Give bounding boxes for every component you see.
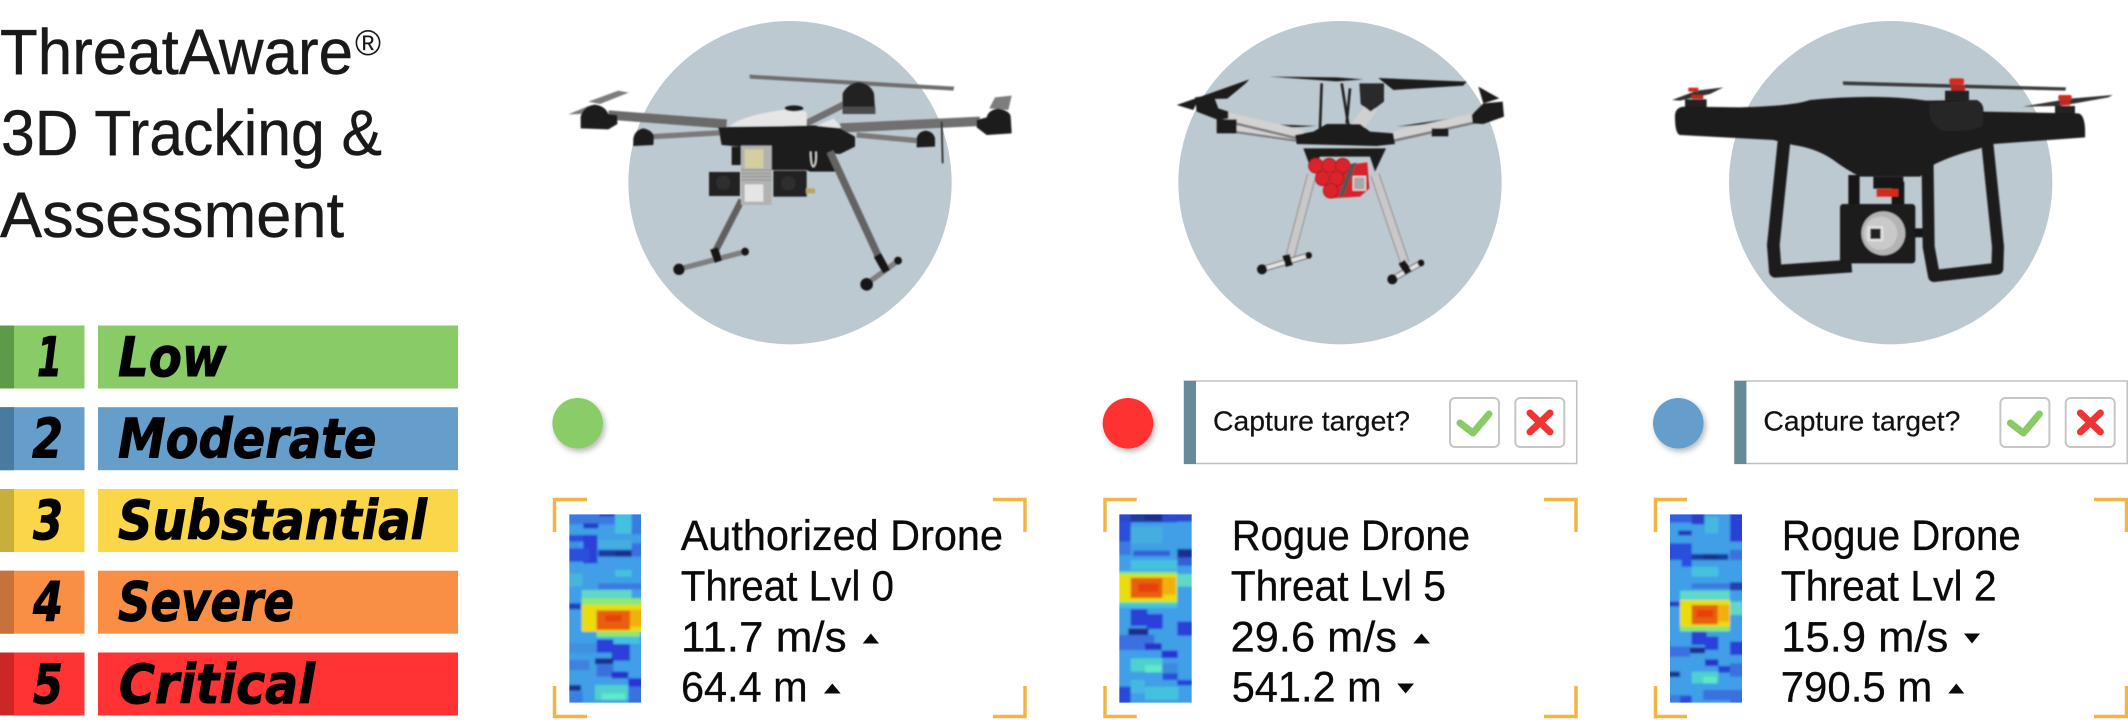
speed trend arrow: up [1413, 634, 1430, 644]
legend row 2: Moderate [0, 407, 458, 470]
readout text: 541.2 m [1232, 664, 1382, 712]
reject button [2066, 398, 2115, 447]
readout text [681, 512, 1003, 712]
title: 3D Tracking & [1, 97, 382, 169]
heatmap [1670, 514, 1742, 703]
legend row 4: Severe: 4 [32, 570, 63, 634]
readout text: Threat Lvl 5 [1231, 563, 1446, 611]
confirm button [2000, 398, 2049, 447]
legend row 3: Substantial: Substantial [118, 489, 428, 552]
readout text: Threat Lvl 2 [1781, 563, 1997, 611]
speed trend arrow: down [1964, 634, 1980, 644]
legend row 1: Low: 1 [37, 326, 62, 389]
legend row 5: Critical: 5 [33, 653, 63, 716]
readout text: 790.5 m [1781, 664, 1932, 712]
readout text: 29.6 m/s [1231, 614, 1397, 662]
title: Assessment [0, 179, 344, 251]
readout text: 64.4 m [681, 664, 808, 712]
capture prompt: Capture target? [1763, 406, 1960, 437]
title: ThreatAware [0, 16, 353, 88]
readout text: 11.7 m/s [681, 614, 847, 662]
legend row 2: Moderate: 2 [32, 408, 63, 470]
panel: rogue drone level 5 [1103, 381, 1577, 716]
drone 1 illustration [568, 21, 1012, 344]
panel: rogue drone level 2 [1653, 381, 2127, 716]
targeting brackets [554, 500, 1025, 716]
targeting brackets [1656, 500, 2126, 716]
threat level legend [0, 326, 458, 716]
distance trend arrow: up [1948, 684, 1964, 694]
readout text [1231, 512, 1470, 712]
drone 3 illustration [1672, 21, 2113, 344]
capture prompt [1184, 381, 1577, 464]
reject button [1515, 398, 1564, 447]
title [0, 16, 382, 251]
capture prompt: Capture target? [1213, 406, 1410, 437]
readout text: Authorized Drone [681, 512, 1003, 560]
status indicator: red [1103, 398, 1153, 449]
heatmap [1119, 514, 1192, 703]
status indicator: green [552, 398, 603, 449]
legend row 1: Low [0, 326, 458, 389]
legend row 3: Substantial: 3 [33, 489, 63, 552]
readout text [1781, 512, 2021, 712]
speed trend arrow: up [863, 634, 879, 644]
legend row 5: Critical: Critical [119, 653, 316, 716]
legend row 2: Moderate: Moderate [118, 408, 376, 470]
readout text: Rogue Drone [1232, 512, 1470, 560]
status indicator: blue [1653, 398, 1704, 449]
targeting brackets [1105, 500, 1576, 716]
readout text: Rogue Drone [1782, 512, 2021, 560]
readout text: 15.9 m/s [1781, 614, 1948, 662]
heatmap [569, 514, 641, 703]
distance trend arrow: up [824, 684, 841, 694]
capture prompt [1734, 381, 2127, 464]
readout text: Threat Lvl 0 [681, 563, 894, 611]
legend row 4: Severe: Severe [118, 570, 294, 634]
legend row 4: Severe [0, 570, 458, 634]
drone 2 illustration [1177, 21, 1504, 344]
distance trend arrow: down [1397, 684, 1414, 694]
confirm button [1450, 398, 1499, 447]
panel: authorized drone [552, 398, 1025, 716]
legend row 5: Critical [0, 652, 458, 716]
legend row 1: Low: Low [118, 326, 227, 389]
title: ® [355, 22, 381, 63]
